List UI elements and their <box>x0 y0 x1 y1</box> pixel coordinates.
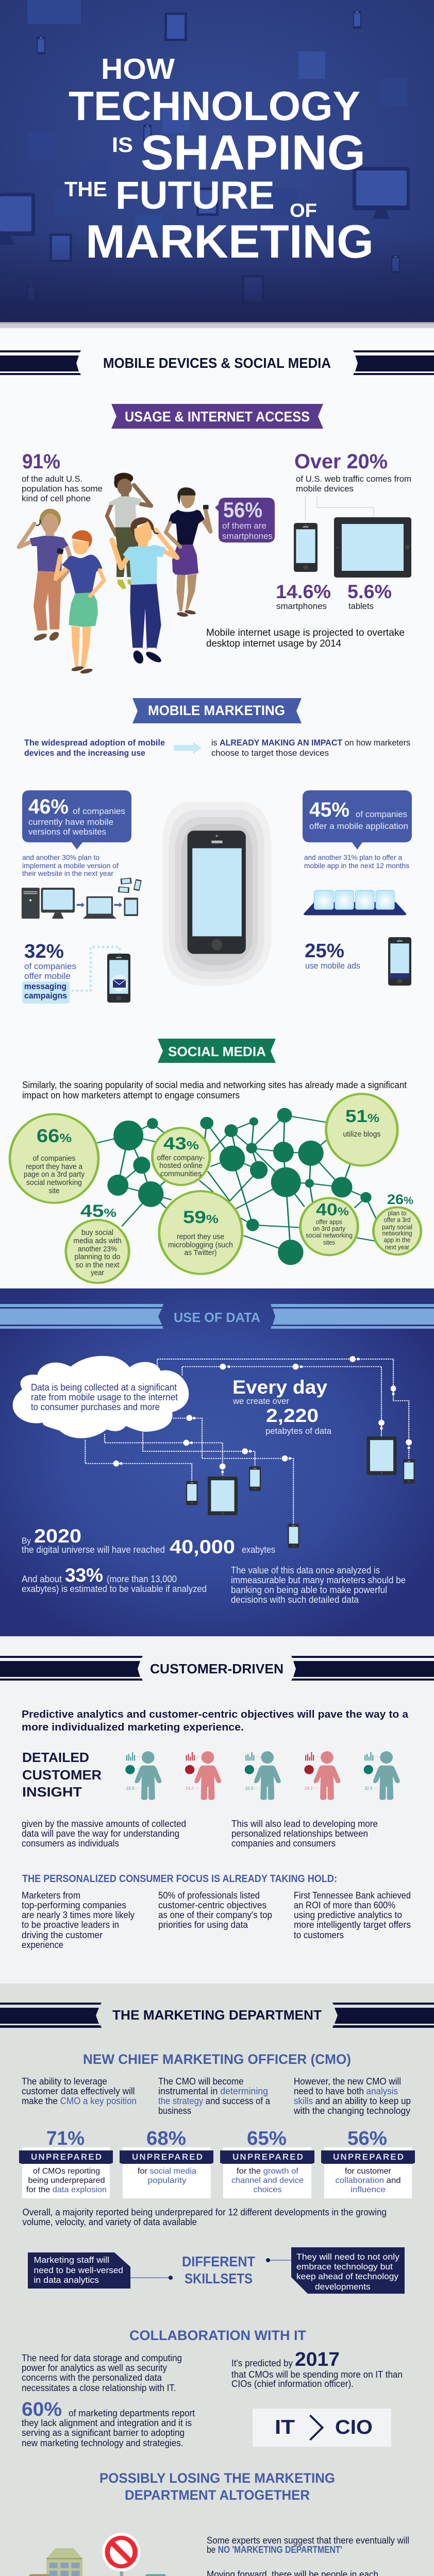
text: overall majority: volume, velocity, and variety of data available <box>23 2217 197 2227</box>
text: cmo key position <box>22 2076 137 2106</box>
building: teal block <box>138 2574 173 2576</box>
stat: 66 percent: report they have a <box>26 1162 83 1171</box>
heading: possibly losing the marketing department <box>99 2470 335 2503</box>
person: dark bob, purple skirt <box>166 487 210 618</box>
text: another 31 percent: mobile app in the next 12 months <box>304 861 409 870</box>
text: cmo skills: with the changing technology <box>293 2106 410 2116</box>
icon: large phone with grey glow <box>162 802 271 986</box>
stat: 2220 petabytes every day <box>232 1377 332 1436</box>
stat: 32 percent messaging: 32% <box>24 941 64 962</box>
text: value of data: immeasurable but many marketers should be <box>231 1575 406 1585</box>
connector: left skillset <box>130 2276 173 2280</box>
heading: different skillsets <box>182 2253 255 2286</box>
heading: detailed customer insight: CUSTOMER <box>22 1767 102 1783</box>
stat: 91 percent: of the adult U.S. <box>22 474 82 484</box>
stat card: 68 percent <box>120 2128 213 2198</box>
stat card: 65 percent: choices <box>254 2185 281 2194</box>
stat: 66 percent: 66% <box>37 1125 72 1146</box>
stat: 91 percent: 91% <box>22 450 60 473</box>
graphic: it greater than cio: CIO <box>335 2416 373 2438</box>
stat: 26 percent <box>382 1192 413 1251</box>
stat: 2220 petabytes every day: petabytes of data <box>265 1426 332 1436</box>
text: value of data: decisions with such detailed data <box>231 1595 359 1605</box>
stat: 26 percent: plan to <box>388 1209 406 1217</box>
text: another 30 percent <box>22 853 119 877</box>
stat: about 33 percent: And about <box>22 1574 62 1584</box>
text: widespread adoption: The widespread adoption of mobile <box>24 738 165 748</box>
banner: the marketing department <box>0 2003 434 2028</box>
section banner: mobile devices and social media <box>0 350 434 375</box>
stat: 14.6 percent and 5.6 percent: 14.6% <box>276 581 331 602</box>
stat: 26 percent: networking <box>382 1229 412 1237</box>
stat: by 2020 40000 exabytes <box>22 1526 275 1557</box>
text: marketers column: to be proactive leaders in <box>22 1920 119 1930</box>
stat: 25 percent mobile ads <box>305 940 360 971</box>
stat: 51 percent <box>343 1107 380 1139</box>
stat: 43 percent: 43 % <box>163 1134 199 1154</box>
chart: social network graph <box>10 1094 421 1283</box>
stat: by 2020 40000 exabytes: 2020 <box>34 1526 81 1547</box>
text: personalized relationships: personalized relationships between <box>231 1828 368 1839</box>
callout: keep ahead of technology <box>291 2247 405 2294</box>
stat: 26 percent: app in the <box>383 1236 410 1244</box>
stat: 40 percent: 40% <box>316 1200 349 1219</box>
text: massive amounts of data <box>22 1819 186 1849</box>
icon: app tiles on tray <box>304 890 406 916</box>
person: curly hair, grey tee <box>107 473 151 589</box>
text: cmo skills: skills and an ability to keep up <box>294 2096 411 2106</box>
stat: by 2020 40000 exabytes: By <box>22 1536 31 1546</box>
stat: about 33 percent: (more than 13,000 <box>107 1574 177 1584</box>
text: cmo skills: However, the new CMO will <box>294 2076 401 2087</box>
labels: figure values <box>126 1786 373 1791</box>
callout: keep ahead of technology: embrace technology but <box>296 2262 393 2272</box>
labels: figure values: 24.2 <box>186 1786 194 1791</box>
text: value of data: banking on being able to make powerful <box>231 1585 387 1595</box>
callout: 56 percent smartphones: 56% <box>223 498 262 522</box>
stat card: 65 percent: for the growth of <box>237 2167 299 2176</box>
text: cmo key position: The ability to leverage <box>22 2076 107 2087</box>
stat: 14.6 percent and 5.6 percent: 5.6% <box>347 581 392 602</box>
stat: 32 percent messaging: campaigns <box>24 991 67 1001</box>
callout: 56 percent smartphones: smartphones <box>222 531 273 541</box>
banner: use of data: USE OF DATA <box>174 1310 260 1325</box>
text: need for data storage: The need for data storage and computing <box>22 2353 182 2363</box>
stat: about 33 percent: exabytes) is estimated to be valuable if analyzed <box>22 1584 207 1594</box>
text: massive amounts of data: given by the massive amounts of collected <box>22 1819 186 1829</box>
stat card: 56 percent: UNPREPARED <box>333 2152 404 2162</box>
text: first tennessee column: more intelligently target offers <box>294 1920 411 1930</box>
title: MARKETING <box>86 216 374 268</box>
stat: over 20 percent web traffic: of U.S. web traffic comes from <box>296 474 411 484</box>
stat: 14.6 percent and 5.6 percent: tablets <box>348 601 374 611</box>
text: data collected: rate from mobile usage to the internet <box>31 1392 178 1402</box>
stat card: 56 percent: for customer <box>345 2167 392 2176</box>
text: another 30 percent: and another 30% plan to <box>22 853 99 861</box>
text: massive amounts of data: data will pave the way for understanding <box>22 1828 179 1839</box>
text: marketers column: Marketers from <box>22 1890 80 1901</box>
hero panel <box>0 0 434 322</box>
icons: customer figures with data <box>125 1751 400 1800</box>
person: red hair, green skirt <box>56 530 104 674</box>
stat: 60 percent lack alignment <box>22 2399 195 2448</box>
building: tan block <box>21 2574 57 2576</box>
stat: 51 percent: utilize blogs <box>343 1130 380 1139</box>
stat: 2220 petabytes every day: 2,220 <box>266 1405 319 1426</box>
stat: predicted by 2017: It's predicted by <box>231 2358 293 2368</box>
stat: over 20 percent web traffic: Over 20% <box>294 450 388 473</box>
stat: 45 percent: media ads with <box>73 1236 122 1245</box>
stat: 43 percent <box>157 1134 205 1178</box>
text: cmo key position: customer data effectively will <box>22 2086 135 2096</box>
title: IS <box>112 133 133 157</box>
callout: 46 percent mobile websites: 46% <box>28 795 69 818</box>
stat card: 71 percent: UNPREPARED <box>31 2152 102 2162</box>
stat: 60 percent lack alignment: of marketing departments report <box>69 2408 195 2418</box>
callout: 56 percent smartphones: of them are <box>222 521 266 531</box>
text: need for data storage: power for analytics as well as security <box>22 2363 167 2373</box>
banner: social media <box>158 1039 276 1063</box>
stat: by 2020 40000 exabytes: exabytes <box>242 1545 275 1555</box>
stat: 26 percent: 26% <box>387 1192 413 1207</box>
stat: 51 percent: 51% <box>345 1107 379 1126</box>
icon: phone with message and dotted trail <box>73 947 130 1003</box>
title: THE <box>64 177 107 201</box>
person: blonde, tan trousers <box>19 509 70 642</box>
text: already making an impact <box>211 738 410 758</box>
text: marketers column: driving the customer <box>22 1930 103 1940</box>
stat: 45 percent: buy social <box>81 1228 113 1237</box>
stat: 91 percent <box>22 450 103 503</box>
stat card: 56 percent: influence <box>350 2185 386 2194</box>
text: cmo strategy: the strategy and success of a <box>158 2096 271 2106</box>
stat: 59 percent: report they use <box>177 1232 224 1241</box>
callout: keep ahead of technology: developments <box>315 2282 370 2292</box>
stat card: 71 percent: 71% <box>46 2128 85 2149</box>
banner: customer-driven <box>0 1656 434 1681</box>
icon: no-entry sign <box>102 2533 140 2576</box>
stat card: 68 percent: for social media <box>138 2167 196 2176</box>
callout: well-versed in analytics: need to be well-versed <box>34 2265 123 2275</box>
stat card: 71 percent <box>19 2128 113 2198</box>
stat card: 65 percent: UNPREPARED <box>232 2152 303 2162</box>
stat: 25 percent mobile ads: 25% <box>305 940 344 962</box>
stat: 91 percent: population has some <box>22 484 103 494</box>
text: professionals column: priorities for using data <box>158 1920 248 1930</box>
text: professionals column: 50% of professionals listed <box>158 1890 260 1901</box>
stat: 66 percent: site <box>48 1187 60 1195</box>
text: marketers column: top-performing companies <box>22 1900 126 1910</box>
text: another 30 percent: implement a mobile version of <box>22 861 119 870</box>
text: marketers column: are nearly 3 times more likely <box>22 1910 135 1920</box>
text: data collected: to consumer purchases and more <box>31 1402 160 1412</box>
stat: 32 percent messaging <box>22 941 76 1004</box>
stat: 60 percent lack alignment: serving as a significant barrier to adopting <box>22 2428 185 2438</box>
stat: over 20 percent web traffic: mobile devices <box>296 484 354 494</box>
heading: different skillsets: SKILLSETS <box>185 2270 253 2286</box>
stat: 59 percent: microblogging (such <box>168 1241 233 1249</box>
callout: 46 percent mobile websites: of companies <box>73 806 125 816</box>
graphic: it greater than cio <box>253 2409 391 2447</box>
callout: keep ahead of technology: keep ahead of technology <box>296 2272 399 2281</box>
stat: 66 percent <box>24 1125 85 1195</box>
text: first tennessee column: using predictive analytics to <box>294 1910 402 1920</box>
stat: by 2020 40000 exabytes: the digital universe will have reached <box>22 1545 165 1555</box>
text: another 31 percent: and another 31% plan to offer a <box>304 853 402 861</box>
text: cmo key position: make the CMO a key position <box>22 2096 137 2106</box>
text: first tennessee column: First Tennessee Bank achieved <box>294 1890 411 1901</box>
text: cmo skills: need to have both analysis <box>294 2086 398 2096</box>
stat: 60 percent lack alignment: new marketing technology and strategies. <box>22 2438 183 2448</box>
text: professionals column: customer-centric objectives <box>158 1900 266 1910</box>
stat card: 65 percent: 65% <box>247 2128 287 2149</box>
text: already making an impact: is ALREADY MAKING AN IMPACT on how marketers <box>211 738 410 748</box>
stat: over 20 percent web traffic <box>294 450 411 494</box>
stat: 2220 petabytes every day: Every day <box>232 1377 327 1398</box>
text: another 30 percent: their website in the next year <box>22 869 113 877</box>
banner: use of data <box>0 1304 434 1329</box>
text: professionals column: as one of their company's top <box>158 1910 272 1920</box>
stat card: 71 percent: being underprepared <box>28 2176 105 2185</box>
illustration: buildings and no sign <box>21 2533 173 2576</box>
text: cmo strategy: business <box>158 2106 191 2116</box>
panel: customer-driven <box>0 1636 434 1984</box>
text: massive amounts of data: consumers as individuals <box>22 1838 119 1849</box>
building: olive tower <box>46 2548 82 2576</box>
callout: 45 percent mobile application: of companies <box>356 809 407 819</box>
stat: 14.6 percent and 5.6 percent: smartphones <box>276 601 327 611</box>
banner: the marketing department: THE MARKETING DEPARTMENT <box>112 2007 322 2023</box>
banner: usage and internet access <box>111 404 323 429</box>
stat: 66 percent: of companies <box>33 1154 75 1163</box>
title <box>64 53 374 268</box>
text: widespread adoption <box>24 738 165 758</box>
stat card: 56 percent: collaboration and <box>335 2176 401 2185</box>
stat: 45 percent <box>73 1201 122 1277</box>
text: no marketing department: Some experts even suggest that there eventually will <box>207 2535 409 2546</box>
stat: 45 percent: planning to do <box>74 1252 121 1261</box>
icon: phone with ad strip <box>388 937 411 986</box>
stat: 26 percent: offer a 3rd <box>383 1216 410 1224</box>
stat: 45 percent: so in the next <box>75 1261 120 1269</box>
stat: 40 percent: on 3rd party <box>313 1225 345 1232</box>
stat: 2220 petabytes every day: we create over <box>232 1396 289 1406</box>
callout: 46 percent mobile websites: currently have mobile <box>28 817 113 827</box>
stat: 66 percent: page on a 3rd party <box>24 1170 85 1179</box>
text: predictive analytics statement: more individualized marketing experience. <box>22 1722 244 1733</box>
text: no marketing department <box>207 2535 409 2555</box>
text: personalized relationships <box>231 1819 378 1849</box>
labels: figure values: 32.5 <box>364 1786 373 1791</box>
icon: hero phones and tablets <box>0 11 410 304</box>
stat: 45 percent: 45 % <box>80 1201 116 1221</box>
heading: possibly losing the marketing department: POSSIBLY LOSING THE MARKETING <box>99 2470 335 2486</box>
labels: figure values: 32.5 <box>245 1786 254 1791</box>
stat card: 71 percent: of CMOs reporting <box>33 2167 100 2176</box>
text: already making an impact: choose to target those devices <box>211 748 329 758</box>
stat: 40 percent <box>306 1200 353 1246</box>
heading: detailed customer insight: DETAILED <box>22 1750 89 1765</box>
text: cmo strategy: instrumental in determining <box>158 2086 268 2096</box>
stat: 60 percent lack alignment: they lack alignment and integration and it is <box>22 2418 192 2428</box>
text: predictive analytics statement <box>22 1709 409 1733</box>
banner: customer-driven: CUSTOMER-DRIVEN <box>150 1661 283 1676</box>
text: overall majority <box>23 2207 387 2227</box>
stat card: 56 percent <box>321 2128 415 2198</box>
connector: right skillset <box>266 2258 291 2262</box>
heading: detailed customer insight: INSIGHT <box>22 1784 82 1800</box>
stat: 26 percent: next year <box>385 1243 410 1251</box>
text: personalized relationships: This will also lead to developing more <box>231 1819 378 1829</box>
text: cmo strategy <box>158 2076 271 2116</box>
text: mobile usage projection <box>206 628 405 649</box>
title: SHAPING <box>141 125 365 180</box>
text: social media intro: impact on how marketers attempt to engage consumers <box>22 1090 240 1100</box>
stat: 43 percent: offer company- <box>157 1154 205 1162</box>
title: OF <box>290 200 317 221</box>
title: TECHNOLOGY <box>69 83 360 129</box>
labels: figure values: 32.5 <box>126 1786 135 1791</box>
text: mobile usage projection: Mobile internet usage is projected to overtake <box>206 628 405 638</box>
stat card: 56 percent: 56% <box>347 2128 387 2149</box>
callout: 45 percent mobile application: offer a mobile application <box>309 821 408 831</box>
banner: social media: SOCIAL MEDIA <box>168 1044 266 1059</box>
heading: detailed customer insight <box>22 1750 102 1800</box>
panel: use of data <box>0 1288 434 1636</box>
callout: 46 percent mobile websites <box>22 790 131 850</box>
text: no marketing department: be NO 'MARKETING DEPARTMENT' <box>207 2545 342 2555</box>
stat: 14.6 percent and 5.6 percent <box>276 581 392 611</box>
stat: 40 percent: offer apps <box>316 1218 342 1226</box>
illustration: people using phones <box>19 473 210 674</box>
callout: 45 percent mobile application <box>303 790 412 850</box>
text: data collected <box>31 1382 178 1412</box>
stat: 45 percent: another 23% <box>78 1245 117 1253</box>
person: brown hair, blue tee <box>112 517 177 665</box>
icon: connected devices <box>186 1436 414 1548</box>
heading: collaboration with it: COLLABORATION WITH IT <box>129 2328 306 2343</box>
icon: desktop to laptop to tablet <box>22 878 142 919</box>
stat: 45 percent: year <box>91 1268 104 1277</box>
banner: mobile marketing <box>132 698 302 723</box>
heading: different skillsets: DIFFERENT <box>182 2253 255 2269</box>
graphic: it greater than cio: IT <box>275 2416 295 2438</box>
text: cmo strategy: The CMO will become <box>158 2076 243 2087</box>
text: need for data storage: necessitates a close relationship with IT. <box>22 2383 176 2393</box>
stat: 40 percent: sites <box>323 1239 335 1246</box>
text: mobile usage projection: desktop internet usage by 2014 <box>206 638 341 649</box>
stat: 59 percent: 59 % <box>183 1208 219 1227</box>
text: another 31 percent <box>304 853 409 870</box>
stat: predicted by 2017: that CMOs will be spending more on IT than <box>231 2369 403 2380</box>
callout: 56 percent smartphones <box>215 498 275 543</box>
stat: 43 percent: hosted online <box>159 1161 203 1170</box>
text: cmo skills <box>293 2076 411 2116</box>
callout: well-versed in analytics <box>28 2252 130 2289</box>
stat: 60 percent lack alignment: 60% <box>22 2399 62 2420</box>
text: social media intro <box>22 1080 407 1100</box>
text: marketers column: experience <box>22 1940 63 1950</box>
stat card: 65 percent <box>220 2128 314 2198</box>
stat: 32 percent messaging: offer mobile <box>24 971 71 981</box>
text: first tennessee column <box>294 1890 411 1940</box>
text: overall majority: Overall, a majority reported being underprepared for 12 different developments in the growing <box>23 2207 387 2217</box>
text: professionals column <box>158 1890 272 1930</box>
text: first tennessee column: to customers <box>294 1930 344 1940</box>
stat card: 65 percent: channel and device <box>231 2176 304 2185</box>
text: data collected: Data is being collected at a significant <box>31 1382 177 1393</box>
text: value of data: The value of this data once analyzed is <box>231 1565 380 1575</box>
diagram: dotted data lines to devices <box>85 1356 412 1524</box>
text: need for data storage: concerns with the personalized data <box>22 2372 162 2383</box>
callout: 46 percent mobile websites: versions of websites <box>28 827 106 837</box>
callout: 45 percent mobile application: 45% <box>309 799 349 821</box>
stat: predicted by 2017 <box>231 2349 403 2389</box>
stat: about 33 percent: 33% <box>65 1565 103 1586</box>
stat: 43 percent: communities <box>160 1170 202 1178</box>
text: predictive analytics statement: Predictive analytics and customer-centric objectives will pave the way to a <box>22 1709 409 1720</box>
text: value of data <box>231 1565 406 1605</box>
banner: mobile marketing: MOBILE MARKETING <box>148 703 285 718</box>
stat: 59 percent: as Twitter) <box>185 1248 217 1257</box>
stat: predicted by 2017: 2017 <box>295 2349 340 2370</box>
arrow <box>174 742 202 754</box>
stat: 40 percent: social networking <box>306 1231 353 1239</box>
callout: keep ahead of technology: They will need to not only <box>296 2252 400 2262</box>
heading: possibly losing the marketing department: DEPARTMENT ALTOGETHER <box>125 2487 310 2503</box>
stat: 66 percent: social networking <box>26 1178 82 1187</box>
text: widespread adoption: devices and the increasing use <box>24 748 145 758</box>
heading: new chief marketing officer: NEW CHIEF MARKETING OFFICER (CMO) <box>83 2052 351 2067</box>
text: marketers column <box>22 1890 135 1950</box>
stat card: 68 percent: popularity <box>147 2176 187 2185</box>
stat card: 71 percent: for the data explosion <box>26 2185 107 2194</box>
text: personalized relationships: companies and consumers <box>231 1838 336 1849</box>
banner: usage and internet access: USAGE & INTERNET ACCESS <box>125 409 310 425</box>
stat: 59 percent <box>168 1208 233 1257</box>
icon: data cloud <box>13 1356 189 1438</box>
icon: phone and tablet with bracket lines <box>294 496 411 578</box>
text: first tennessee column: an ROI of more than 600% <box>294 1900 395 1910</box>
section banner: mobile devices and social media: MOBILE DEVICES & SOCIAL MEDIA <box>103 355 331 371</box>
stat card: 68 percent: 68% <box>146 2128 186 2149</box>
text: social media intro: Similarly, the soaring popularity of social media and networking sites has already made a significant <box>22 1080 407 1090</box>
callout: well-versed in analytics: in data analytics <box>34 2275 99 2285</box>
text: need for data storage <box>22 2353 182 2393</box>
stat: 91 percent: kind of cell phone <box>22 494 91 503</box>
stat: 32 percent messaging: of companies <box>24 961 76 971</box>
stat: 26 percent: party social <box>382 1223 412 1231</box>
stat card: 68 percent: UNPREPARED <box>132 2152 203 2162</box>
stat: 25 percent mobile ads: use mobile ads <box>305 961 360 971</box>
stat: 32 percent messaging: messaging <box>24 981 66 991</box>
stat: by 2020 40000 exabytes: 40,000 <box>170 1536 235 1557</box>
title: HOW <box>101 53 175 86</box>
stat: about 33 percent <box>22 1565 207 1594</box>
panel: the marketing department <box>0 1984 434 2576</box>
title: FUTURE <box>115 174 275 217</box>
heading: personalized consumer focus: THE PERSONALIZED CONSUMER FOCUS IS ALREADY TAKING HOLD: <box>22 1873 337 1885</box>
stat: predicted by 2017: CIOs (chief information officer). <box>231 2379 354 2389</box>
callout: well-versed in analytics: Marketing staff will <box>34 2255 109 2265</box>
labels: figure values: 24.2 <box>305 1786 313 1791</box>
